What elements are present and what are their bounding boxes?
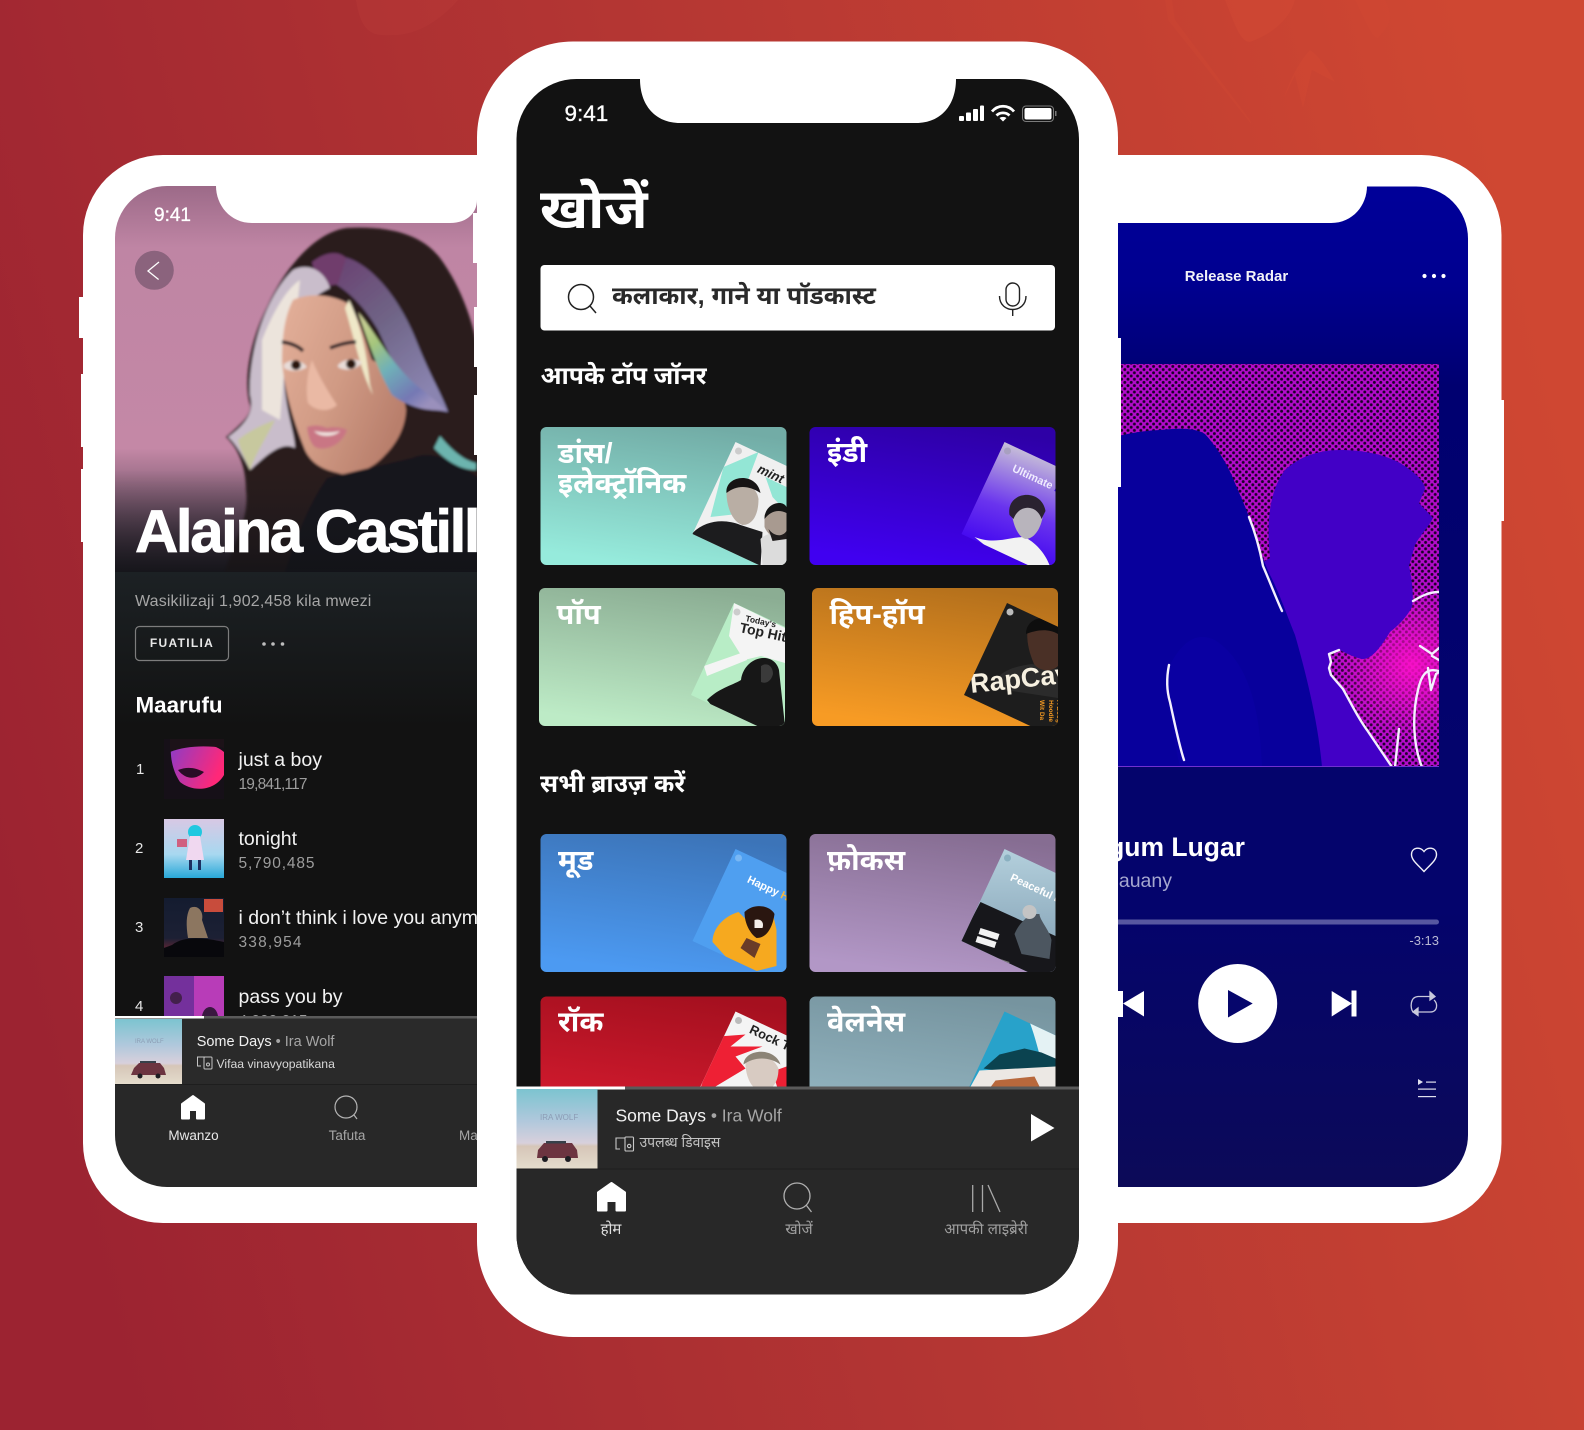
album: happy hits: [680, 844, 802, 974]
track 2: tonight: [238, 828, 298, 850]
album: today's top hits: [679, 598, 796, 728]
album: peaceful piano: Peaceful Piano: [1008, 872, 1084, 916]
center phone frame: [477, 42, 1118, 1337]
track 3: i don’t think i love you anymore: [238, 907, 506, 929]
bottom navigation: [115, 1084, 511, 1187]
track 2: 2: [135, 840, 143, 857]
album: rapcaviar: RapCaviar: [968, 655, 1105, 699]
album: happy hits: Happy Hits: [745, 874, 802, 909]
track artist: Dauany: [1105, 870, 1172, 892]
woman silhouette: [1100, 429, 1322, 767]
right phone notch: [1110, 186, 1367, 223]
heart icon: [1412, 848, 1436, 872]
monthly listeners: Wasikilizaji 1,902,458 kila mwezi: [135, 593, 371, 610]
mini player: उपलब्ध डिवाइस: [640, 1134, 721, 1150]
left phone: artist page: [79, 155, 477, 1223]
mini player: [516, 1086, 1080, 1169]
track 3: [135, 898, 506, 957]
mini player album art: IRA WOLF: [135, 1039, 164, 1045]
album: mint: [680, 437, 790, 567]
repeat icon: [1411, 992, 1437, 1016]
popular heading: Maarufu: [136, 692, 223, 718]
card: pop: पॉप: [556, 598, 602, 631]
bottom navigation: होम: [601, 1221, 622, 1238]
album: rapcaviar: [952, 598, 1105, 729]
track 4: 4: [135, 998, 143, 1015]
album: today's top hits: Top Hits: [738, 619, 796, 646]
mini player album art: [115, 1019, 182, 1084]
bottom navigation: Tafuta: [329, 1128, 366, 1143]
remaining time: -3:13: [1409, 933, 1439, 948]
artwork white line drawing: [1167, 517, 1439, 767]
artist info panel: [115, 572, 477, 1016]
mini player: Some Days • Ira Wolf: [616, 1106, 782, 1126]
card: indie: [810, 427, 1081, 567]
track 4: pass you by: [238, 986, 343, 1008]
right phone screen: [1118, 186, 1468, 1187]
album: ultimate indie: Ultimate Indie: [1010, 463, 1081, 504]
mini player album art: IRA WOLF: [540, 1113, 578, 1122]
card: rock: [540, 996, 810, 1136]
track 2: [135, 819, 314, 878]
play button: [1198, 964, 1277, 1043]
page title: खोजें: [540, 178, 649, 240]
card: focus: [810, 834, 1084, 984]
device icon: [198, 1057, 212, 1069]
left phone notch: [216, 186, 477, 223]
follow button: FUATILIA: [150, 636, 214, 650]
album: ultimate indie: [950, 437, 1081, 567]
artist header photo: [115, 186, 513, 1187]
card: dance electronic: डांस/: [557, 438, 613, 470]
bottom navigation: Maktaba: [459, 1128, 511, 1143]
nav icon: search: [784, 1183, 812, 1212]
center phone notch: [640, 79, 956, 123]
album: today's top hits: Today's: [745, 613, 777, 629]
track title: Algum Lugar: [1082, 832, 1245, 862]
mini player: Some Days • Ira Wolf: [197, 1034, 335, 1050]
signal bars: [959, 106, 984, 121]
track 3: 338,954: [238, 934, 302, 951]
card: wellness: वेलनेस: [827, 1004, 906, 1038]
track 1: 1: [136, 761, 144, 778]
track 1: just a boy: [238, 749, 322, 771]
album artwork: [1100, 364, 1439, 768]
center phone: search screen: [473, 42, 1121, 1337]
mini player: Vifaa vinavyopatikana: [216, 1057, 335, 1071]
right phone side button: [1496, 400, 1504, 521]
browse all heading: सभी ब्राउज़ करें: [540, 770, 686, 798]
nav icon: search: [335, 1096, 357, 1119]
search bar: कलाकार, गाने या पॉडकास्ट: [612, 281, 876, 310]
card: dance electronic: इलेक्ट्रॉनिक: [558, 466, 687, 500]
playlist title: Release Radar: [1185, 268, 1288, 285]
album: rapcaviar: Wit Da: [1038, 700, 1045, 721]
right phone frame: [1000, 155, 1502, 1223]
left phone side buttons: [79, 297, 89, 542]
card: indie: इंडी: [827, 436, 868, 469]
center phone side buttons: [473, 213, 1121, 487]
album: rock this: Rock This: [747, 1022, 810, 1061]
card: mood: [540, 834, 802, 974]
card: hip-hop: [812, 588, 1105, 729]
track 1: 19,841,117: [238, 776, 308, 793]
left phone frame: [83, 155, 603, 1223]
track 4: 4,000,015: [238, 1013, 307, 1030]
more options dots: [1422, 274, 1446, 278]
previous button: [1118, 991, 1144, 1017]
search icon: [568, 284, 596, 313]
mini player: [115, 1016, 477, 1086]
left phone screen: [115, 186, 513, 1187]
card: pop: [539, 588, 796, 728]
right phone: now playing: [1118, 155, 1504, 1223]
man silhouette: [1264, 450, 1433, 766]
card: mood: मूड: [558, 845, 594, 878]
track 3: 3: [135, 919, 143, 936]
status bar time: 9:41: [154, 205, 191, 226]
battery icon: [1022, 106, 1056, 122]
card: hip-hop: हिप-हॉप: [830, 598, 926, 631]
bottom navigation: खोजें: [785, 1220, 814, 1238]
mini player album art: [516, 1089, 598, 1168]
card: dance electronic: [540, 427, 790, 567]
nav icon: home: [182, 1096, 204, 1118]
album: ocean painting: [950, 1006, 1060, 1136]
album: rapcaviar: A Boogie: [1055, 700, 1062, 729]
status time: 9:41: [564, 101, 608, 126]
genre grid: [539, 427, 1105, 729]
next button: [1332, 990, 1356, 1016]
bottom navigation: Mwanzo: [168, 1128, 219, 1143]
search bar: [540, 265, 1055, 330]
nav icon: home: [598, 1183, 625, 1210]
portrait of artist: [225, 228, 482, 572]
nav icon: library: [973, 1185, 1000, 1212]
center phone screen: [516, 79, 1105, 1295]
album: peaceful piano: [950, 844, 1084, 984]
play icon: [1031, 1114, 1054, 1142]
queue icon: [1418, 1079, 1436, 1097]
track 2: 5,790,485: [238, 855, 314, 872]
top genres heading: आपके टॉप जॉनर: [540, 362, 708, 390]
bottom navigation: [516, 1168, 1080, 1295]
album: rock this: [680, 1006, 810, 1136]
artist name: Alaina Castillo: [135, 498, 513, 565]
device icon: [616, 1137, 634, 1151]
more options dots: [262, 642, 284, 646]
wifi icon: [992, 106, 1014, 122]
popular track list: [135, 739, 477, 1016]
bottom navigation: आपकी लाइब्रेरी: [944, 1220, 1029, 1238]
browse grid: [540, 834, 1084, 1136]
album: mint: mint: [755, 461, 787, 487]
track 1: [137, 739, 322, 791]
microphone icon: [1000, 283, 1026, 316]
progress bar: [1100, 920, 1439, 924]
card: focus: फ़ोकस: [827, 844, 906, 877]
card: rock: रॉक: [558, 1006, 604, 1038]
track 4: [135, 976, 342, 1016]
follow button: [136, 626, 228, 660]
back button: [135, 251, 174, 290]
card: wellness: [810, 996, 1060, 1136]
album: rapcaviar: Hoodie: [1047, 700, 1054, 722]
